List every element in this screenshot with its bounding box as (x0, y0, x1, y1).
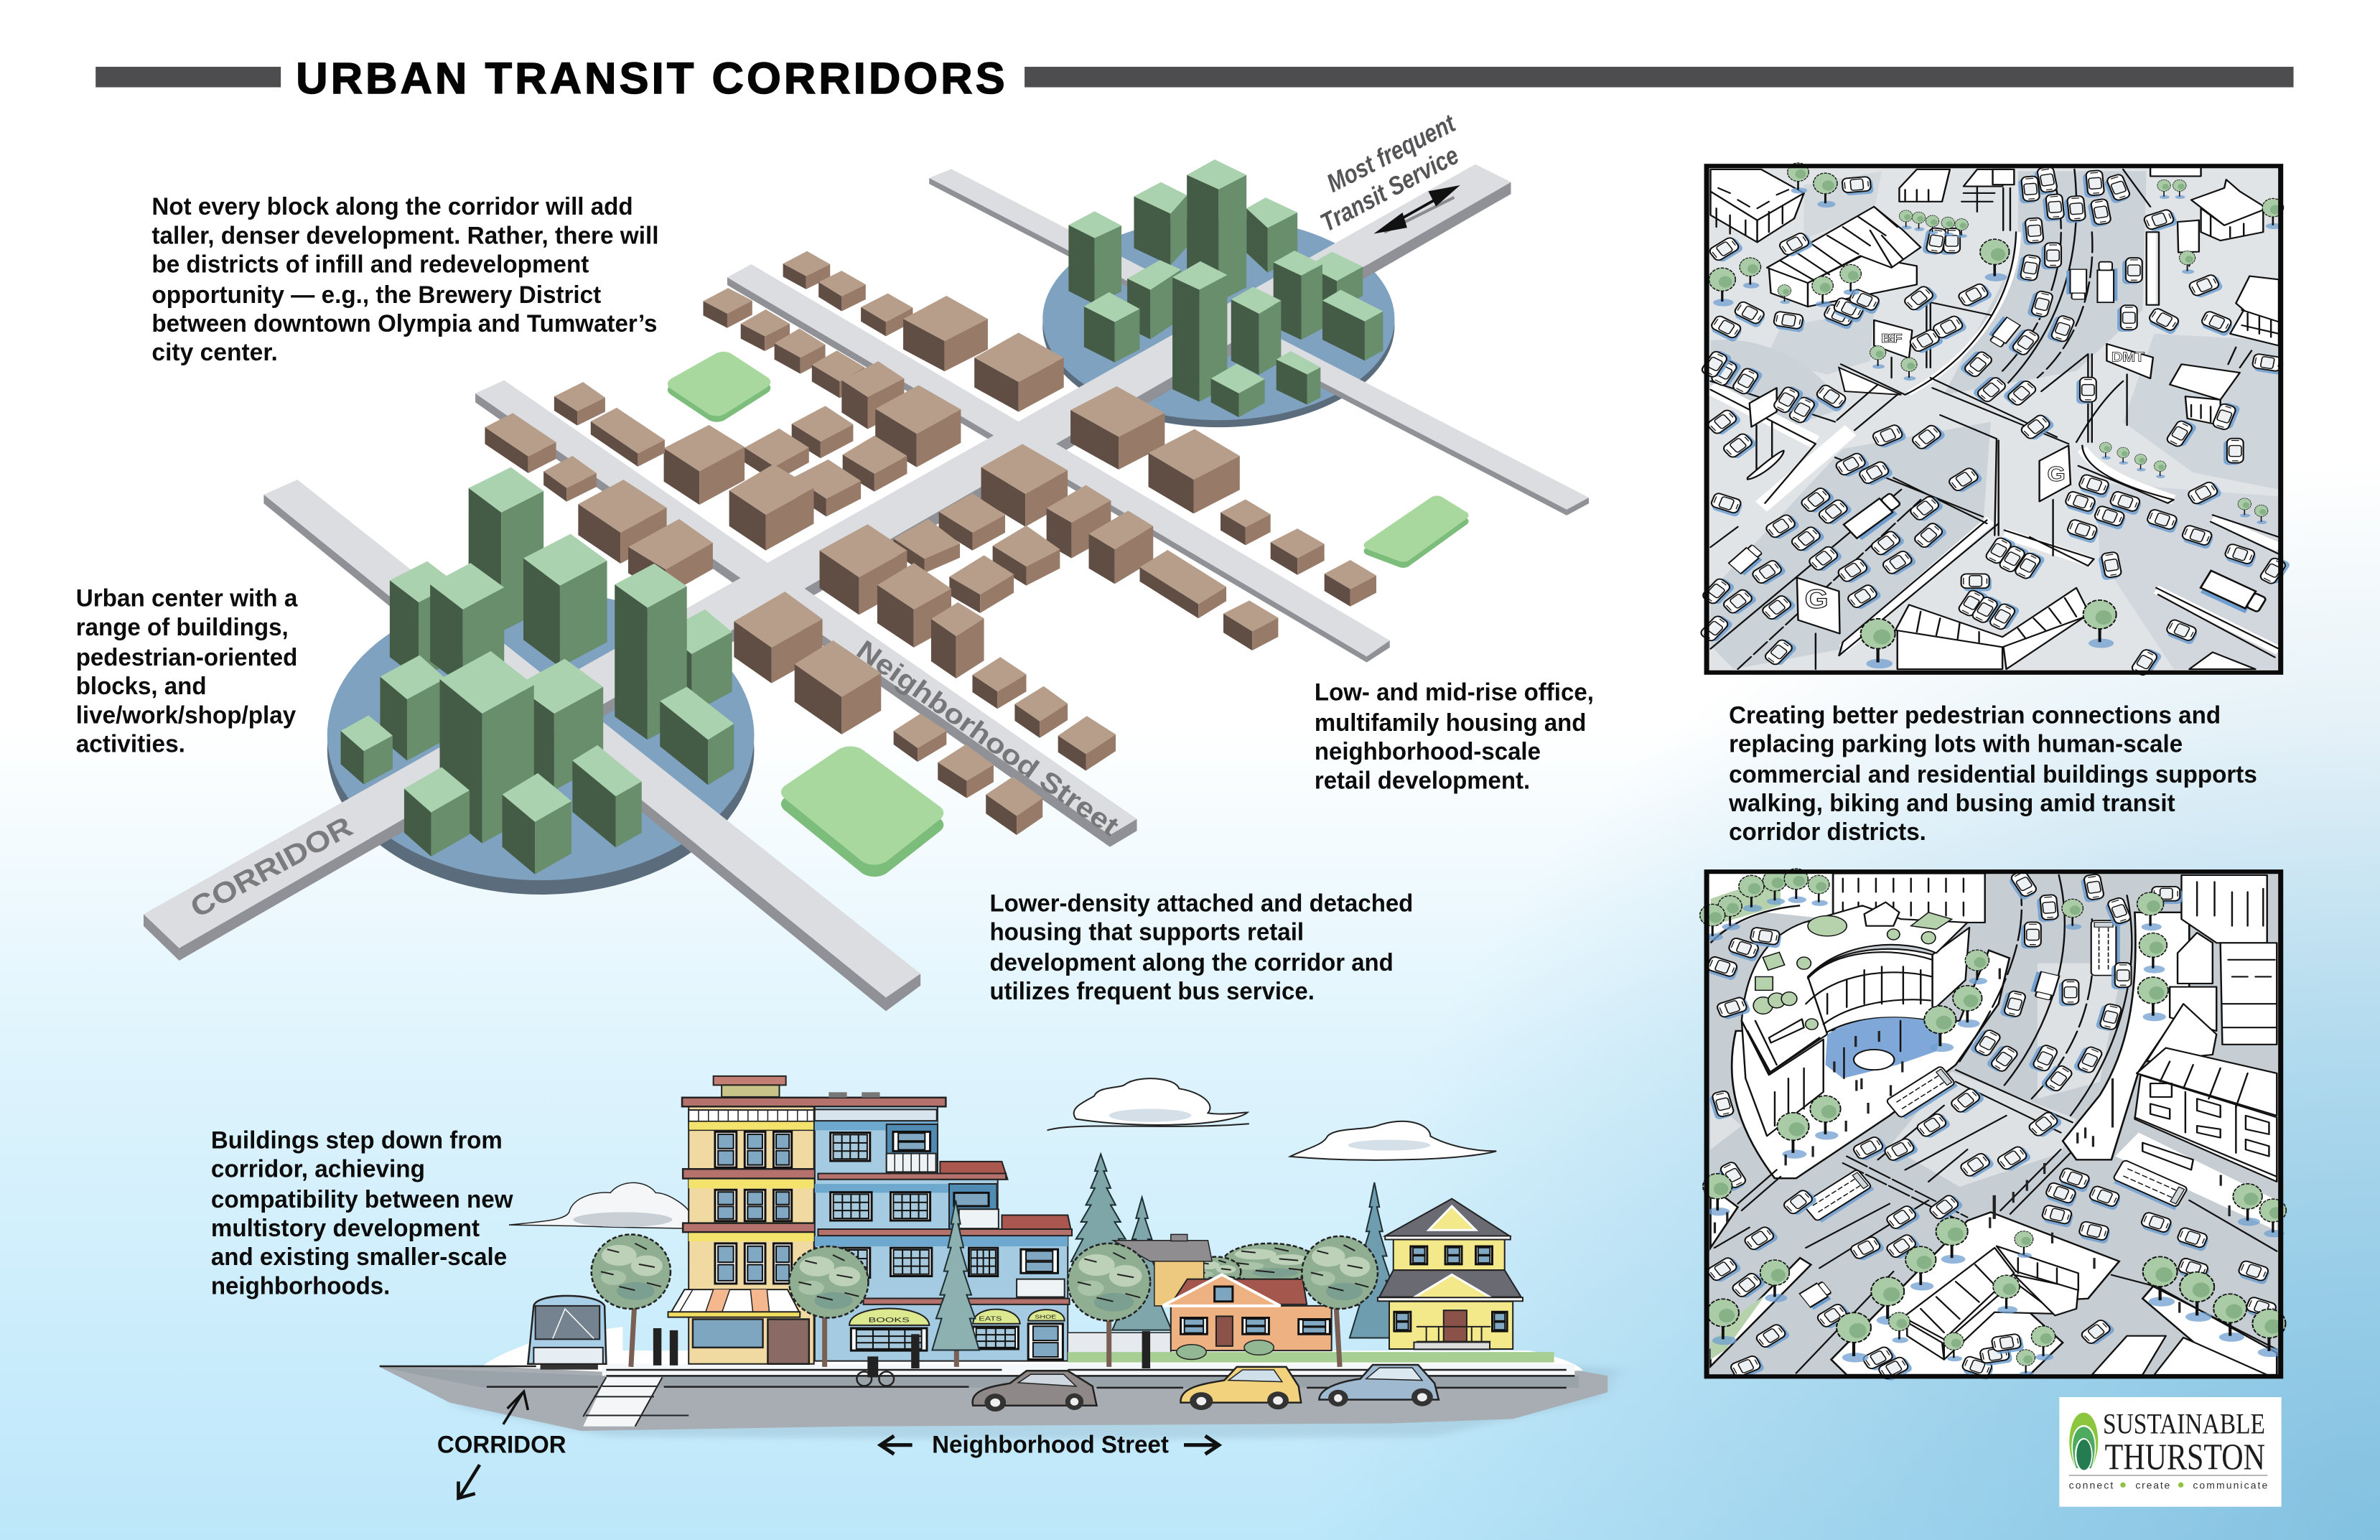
building: kiosk (2170, 364, 2240, 425)
upper-left green edge and lot (1709, 874, 1831, 943)
isometric corridor map (144, 159, 1589, 1011)
logo: Sustainable Thurston (2059, 1397, 2282, 1507)
text: buildings step down: neighborhoods. (211, 1272, 390, 1299)
street diagram labels (437, 1431, 1219, 1498)
road network (144, 164, 1589, 1011)
text: pedestrian connections: commercial and residential buildings supports (1729, 761, 2257, 788)
road and pavement washes (1711, 171, 2279, 669)
title banner: URBAN TRANSIT CORRIDORS (296, 53, 1005, 103)
sign: top right (2178, 220, 2199, 266)
logo wordmark (2069, 1408, 2268, 1490)
lower right rooftops (2092, 1336, 2267, 1375)
lane markings and curbs (1711, 169, 2279, 669)
lighter road washes (1711, 963, 2123, 1187)
sign: DMT (2106, 344, 2153, 425)
traffic (1699, 167, 2291, 678)
shop awnings: EATS (979, 1315, 1002, 1322)
shop awnings: BOOKS (868, 1317, 910, 1324)
shop awnings (849, 1309, 1065, 1325)
street trees (592, 1200, 1378, 1367)
text: buildings step down: and existing smaller-scale (211, 1243, 507, 1271)
white sidewalks (1711, 913, 2277, 1375)
yellow mixed-use building (668, 1076, 946, 1364)
street elevation illustration (380, 1076, 1620, 1439)
text: infill districts: between downtown Olympia and Tumwater’s (151, 310, 657, 337)
text: infill districts (151, 193, 659, 366)
mid-rise building at top (1833, 874, 1985, 923)
roof gardens (1753, 913, 1952, 1030)
text: urban center: activities. (76, 731, 185, 758)
text: infill districts: taller, denser development. Rather, there will (151, 222, 659, 249)
building: top-left shop (1711, 169, 1804, 242)
label: Neighborhood Street: Neighborhood Street (932, 1431, 1169, 1458)
low and mid-rise brown buildings (485, 251, 1376, 835)
text: buildings step down: Buildings step down from (211, 1126, 503, 1154)
white sidewalks (1711, 232, 2279, 650)
title banner (95, 53, 2294, 103)
text: urban center (76, 585, 299, 758)
shop awnings: SHOE (1035, 1314, 1056, 1320)
transit node green towers (1068, 159, 1383, 417)
text: low and mid-rise (1315, 679, 1594, 794)
sign: G large (1797, 578, 1840, 669)
arrow: double-headed transit direction (1373, 185, 1460, 234)
big roof residential block (2134, 1048, 2277, 1182)
panel frame (1707, 872, 2281, 1376)
sign: DMT: DMT (2111, 350, 2145, 365)
buildings (1711, 169, 2279, 669)
sign: G small (2040, 446, 2071, 556)
text: pedestrian connections: corridor districts. (1729, 818, 1926, 846)
blue stepped mixed-use building (815, 1092, 1072, 1361)
road signs (1747, 166, 2201, 669)
text: pedestrian connections: replacing parking lots with human-scale (1729, 731, 2183, 758)
sign: G small: G (2047, 463, 2066, 486)
L-shaped building bottom (1903, 1246, 2078, 1360)
text: low and mid-rise: retail development. (1315, 767, 1530, 794)
panel frame (1707, 166, 2281, 673)
tall towers at right (2147, 875, 2277, 1061)
text: lower density housing: Lower-density attached and detached (989, 890, 1413, 918)
text: buildings step down: compatibility between new (211, 1186, 513, 1213)
building: right storefront (2230, 276, 2279, 345)
text: urban center: pedestrian-oriented (76, 644, 297, 671)
text: buildings step down: corridor, achieving (211, 1156, 425, 1183)
background tan house (1068, 1234, 1212, 1356)
text: infill districts: be districts of infill and redevelopment (151, 251, 589, 278)
street trees (1700, 869, 2286, 1376)
text: low and mid-rise: Low- and mid-rise office, (1315, 679, 1594, 706)
text: buildings step down: multistory development (211, 1215, 480, 1242)
label: Transit Service: Transit Service (1315, 140, 1463, 238)
pedestrians and cyclist (653, 1328, 1150, 1386)
text: lower density housing: housing that supports retail (989, 919, 1304, 946)
text: infill districts: opportunity — e.g., the Brewery District (151, 281, 601, 309)
logo wordmark: SUSTAINABLE (2103, 1408, 2265, 1440)
curved mixed-use building with plaza (1742, 902, 1969, 1136)
pedestrians (1714, 969, 2231, 1313)
label: Neighborhood Street on road: Neighborhood Street (851, 635, 1124, 842)
text: buildings step down (211, 1126, 513, 1299)
text annotations (76, 193, 2257, 1299)
transit node blue disc (1042, 218, 1394, 427)
sign: BSF: BSF (1881, 332, 1903, 346)
text: lower density housing (989, 890, 1413, 1005)
logo wordmark: THURSTON (2105, 1437, 2265, 1478)
trees and planters (1709, 163, 2284, 668)
arrow: street right (1184, 1436, 1219, 1454)
text: urban center: range of buildings, (76, 614, 289, 641)
logo mark (2069, 1413, 2098, 1472)
arrow: street left (880, 1436, 913, 1454)
building: top-right pavilion (2191, 179, 2267, 241)
text: urban center: Urban center with a (76, 585, 299, 612)
background firs and trees (1071, 1154, 1399, 1338)
sign: left pylon (1747, 388, 1783, 480)
clouds (509, 1078, 1496, 1228)
text: pedestrian connections: Creating better pedestrian connections and (1729, 701, 2221, 729)
panel: improved pedestrian-oriented corridor illustration (1700, 869, 2286, 1383)
road surface (380, 1327, 1607, 1431)
text: infill districts: Not every block along the corridor will add (151, 193, 633, 220)
text: lower density housing: utilizes frequent bus service. (989, 978, 1315, 1005)
orange house (1068, 1274, 1554, 1363)
striped awning (668, 1289, 800, 1317)
text: pedestrian connections (1728, 701, 2257, 846)
text: infill districts: city center. (151, 339, 278, 366)
vehicles (1705, 869, 2279, 1383)
label: CORRIDOR: CORRIDOR (437, 1431, 566, 1458)
traffic signals (1926, 302, 2092, 536)
urban center blue disc (327, 591, 754, 895)
label: CORRIDOR: CORRIDOR (185, 810, 358, 924)
car: yellow hatchback (1180, 1367, 1301, 1410)
text: lower density housing: development along the corridor and (989, 949, 1394, 976)
building: top-center kiosks (1899, 169, 2010, 212)
sign: top center (1993, 169, 2014, 230)
logo wordmark: connect (2069, 1479, 2113, 1490)
arrow: corridor toward (458, 1465, 480, 1498)
parks (679, 359, 1461, 867)
road labels (185, 108, 1463, 924)
sign: BSF (1874, 320, 1912, 378)
building: hatched roof restaurant (1767, 207, 1921, 307)
urban center green towers (341, 467, 734, 874)
arrow: corridor away (503, 1391, 528, 1424)
text: pedestrian connections: walking, biking and busing amid transit (1728, 790, 2175, 817)
yellow house (1378, 1199, 1523, 1349)
car: blue hatchback (1319, 1365, 1439, 1406)
text: urban center: live/work/shop/play (76, 701, 296, 729)
soft ground shadow (442, 1363, 1620, 1439)
label: Most frequent: Most frequent (1322, 108, 1461, 198)
logo wordmark: communicate (2193, 1479, 2268, 1490)
text: low and mid-rise: neighborhood-scale (1315, 738, 1541, 765)
bus (528, 1296, 606, 1370)
car: gray sedan (973, 1371, 1096, 1411)
panel: today's auto-oriented corridor illustration (1699, 163, 2291, 678)
text: low and mid-rise: multifamily housing and (1315, 709, 1586, 737)
text: urban center: blocks, and (76, 673, 207, 700)
lane markings (1714, 875, 2277, 1373)
building: bottom strip center (1895, 588, 2090, 669)
fountain (1854, 1050, 1894, 1070)
logo wordmark: create (2135, 1479, 2170, 1490)
sign: G large: G (1805, 585, 1829, 614)
